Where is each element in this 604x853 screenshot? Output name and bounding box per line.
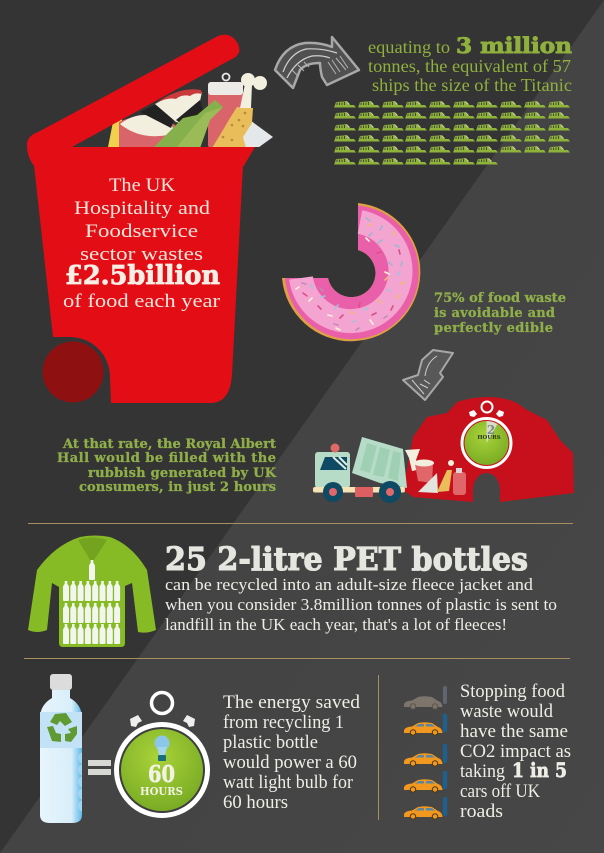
stopwatch 2 hours: 2 (487, 423, 495, 437)
stopwatch 2 hours: HOURS (477, 435, 501, 441)
bin text: sector wastes (80, 244, 203, 265)
text: fleece paragraph: when you consider 3.8million tonnes of plastic is sent to (165, 595, 557, 614)
water bottle with recycle symbol (40, 674, 82, 823)
text: energy saved: plastic bottle (223, 733, 318, 753)
text: stopping food waste: roads (460, 802, 503, 822)
red wheelie bin (27, 35, 273, 403)
text: stopping food waste: CO2 impact as (460, 742, 571, 762)
bin body (34, 165, 243, 403)
text: energy saved: from recycling 1 (223, 713, 344, 733)
text: energy saved: The energy saved (223, 693, 361, 713)
text: 3 million tonnes (368, 33, 572, 95)
text: energy saved: watt light bulb for (223, 773, 353, 793)
text: Royal Albert Hall (57, 437, 277, 495)
light bulb icon (154, 736, 170, 761)
text: stopping food waste: 1 in 5 (512, 758, 567, 782)
bin wheel (42, 342, 104, 402)
stopwatch 60 hours: 60 (148, 761, 175, 788)
text: 75% of food waste (434, 291, 566, 336)
text: 3 million tonnes: tonnes, the equivalent of 57 (368, 56, 571, 76)
text: 3 million tonnes: ships the size of the Titanic (372, 75, 572, 95)
text: 3 million tonnes: 3 million (456, 33, 572, 58)
sketch arrow down (403, 350, 453, 400)
bin text: Hospitality and (74, 198, 211, 219)
text: 75% of food waste: perfectly edible (434, 321, 553, 336)
green fleece jacket (28, 536, 156, 647)
bin text: of food each year (63, 291, 221, 312)
stopwatch 60 hours: HOURS (140, 785, 183, 798)
57 Titanic ship icons (334, 101, 570, 164)
stopwatch 2 hours (462, 402, 511, 468)
text: stopping food waste: Stopping food (460, 682, 566, 702)
bin text: £2.5billion (65, 261, 220, 291)
equals sign (88, 760, 111, 775)
text: Royal Albert Hall: At that rate, the Royal Albert (62, 437, 276, 452)
bin lid (27, 35, 255, 167)
text: stopping food waste (460, 682, 571, 822)
rubbish truck (313, 437, 407, 503)
bin text (63, 175, 221, 312)
text: stopping food waste: cars off UK (460, 782, 541, 802)
text: 75% of food waste: is avoidable and (434, 306, 555, 321)
text: Royal Albert Hall: consumers, in just 2 hours (79, 480, 276, 495)
text: fleece paragraph: landfill in the UK each year, that's a lot of fleeces! (165, 615, 507, 634)
Royal Albert Hall (313, 397, 574, 503)
text: Royal Albert Hall: Hall would be filled with the (57, 451, 276, 466)
text: energy saved (223, 693, 361, 813)
text: fleece paragraph: can be recycled into an adult-size fleece jacket and (165, 575, 534, 594)
doughnut three quarters (282, 203, 420, 341)
heading: 25 2-litre PET bottles: 25 2-litre PET bottles (165, 540, 528, 578)
stopwatch 60 hours (116, 692, 208, 816)
grey car (404, 688, 445, 709)
sprinkles (296, 218, 405, 330)
text: stopping food waste: waste would (460, 702, 554, 722)
bin text: Foodservice (85, 221, 198, 242)
text: fleece paragraph (165, 575, 557, 634)
text: 3 million tonnes: equating to (368, 37, 450, 57)
text: energy saved: would power a 60 (223, 753, 357, 773)
text: Royal Albert Hall: rubbish generated by UK (88, 466, 277, 481)
bin food contents (108, 73, 273, 150)
sketch arrow right (275, 37, 359, 88)
rubbish pile (405, 449, 466, 495)
bottles on jacket (63, 560, 120, 644)
five cars icons (404, 688, 445, 819)
text: stopping food waste: taking (460, 762, 505, 782)
text: energy saved: 60 hours (223, 793, 288, 813)
recycle symbol (47, 713, 77, 742)
text: stopping food waste: have the same (460, 722, 568, 742)
bin text: The UK (109, 175, 175, 196)
text: 75% of food waste: 75% of food waste (434, 291, 566, 306)
divider lines (24, 524, 573, 820)
